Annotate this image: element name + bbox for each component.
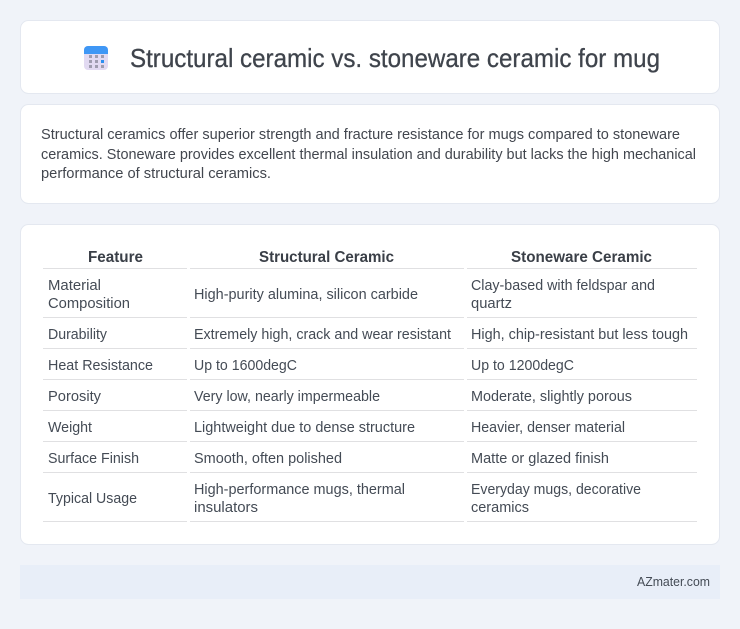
row: durability: High, chip-resistant but less tough [471, 326, 688, 343]
row: weight: Lightweight due to dense structure [194, 419, 415, 436]
summary text: Structural ceramics offer superior strength and fracture resistance for mugs compared to stoneware [41, 126, 680, 143]
summary text: performance of structural ceramics. [41, 165, 271, 182]
table header: Structural Ceramic [259, 249, 394, 266]
footer credit: AZmater.com [637, 574, 710, 589]
summary text [41, 126, 696, 182]
row: surface finish: Matte or glazed finish [471, 450, 609, 467]
row: heat resistance: Up to 1600degC [194, 357, 297, 374]
row: durability: Extremely high, crack and wear resistant [194, 326, 452, 343]
row: material composition [48, 277, 655, 312]
row: surface finish [48, 450, 609, 467]
row: heat resistance: Heat Resistance [48, 357, 153, 374]
icon: calendar [84, 46, 108, 70]
panel: summary [20, 104, 720, 204]
row: weight [48, 419, 625, 436]
row: material composition: High-purity alumina, silicon carbide [194, 286, 418, 303]
row: surface finish: Smooth, often polished [194, 450, 342, 467]
title text: Structural ceramic vs. stoneware ceramic for mug [130, 43, 660, 73]
table header [88, 249, 652, 266]
table header: Feature [88, 249, 143, 266]
row: porosity: Porosity [48, 388, 101, 405]
row: typical usage [48, 481, 641, 516]
row: material composition: Composition [48, 295, 130, 312]
row: durability: Durability [48, 326, 107, 343]
row: weight: Heavier, denser material [471, 419, 625, 436]
row: typical usage: insulators [194, 499, 258, 516]
summary text: ceramics. Stoneware provides excellent thermal insulation and durability but lacks the high mechanical [41, 146, 696, 163]
row: surface finish: Surface Finish [48, 450, 139, 467]
row: material composition: Material [48, 277, 101, 294]
table header: Stoneware Ceramic [511, 249, 652, 266]
row: material composition: quartz [471, 295, 512, 312]
panel: comparison table [20, 224, 720, 544]
row: heat resistance [48, 357, 574, 374]
row: typical usage: ceramics [471, 499, 529, 516]
row: heat resistance: Up to 1200degC [471, 357, 574, 374]
row: porosity: Moderate, slightly porous [471, 388, 632, 405]
row: typical usage: Everyday mugs, decorative [471, 481, 641, 498]
footer bar [20, 565, 720, 599]
row: durability [48, 326, 688, 343]
row: porosity: Very low, nearly impermeable [194, 388, 380, 405]
row: porosity [48, 388, 632, 405]
panel: title [20, 20, 720, 94]
row: typical usage: High-performance mugs, thermal [194, 481, 405, 498]
row: typical usage: Typical Usage [48, 490, 137, 507]
row: material composition: Clay-based with feldspar and [471, 277, 655, 294]
row: weight: Weight [48, 419, 93, 436]
